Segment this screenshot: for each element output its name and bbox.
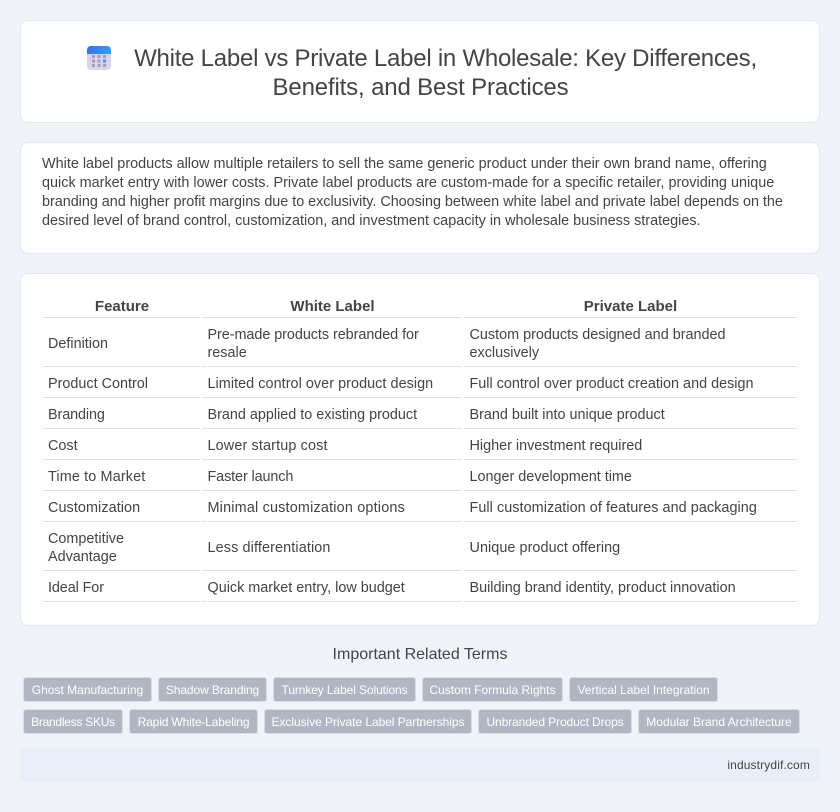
table rows: Unique product offering (470, 540, 620, 556)
table header (95, 298, 677, 315)
table rows: Limited control over product design (208, 376, 433, 392)
table rows: Faster launch (208, 469, 293, 485)
table rows: Less differentiation (208, 540, 331, 556)
footer source text: industrydif.com (727, 758, 810, 772)
footer (20, 748, 820, 782)
table rows: Brand applied to existing product (208, 407, 417, 423)
table rows: exclusively (470, 345, 539, 361)
intro text: White label products allow multiple retailers to sell the same generic product under their own brand name, offering (42, 156, 767, 172)
table rows: Full control over product creation and design (470, 376, 753, 392)
related terms tags: Rapid White-Labeling (138, 715, 249, 729)
table rows (43, 317, 797, 602)
title: White Label vs Private Label in Wholesale: Key Differences, (134, 45, 757, 72)
related terms tags: Brandless SKUs (31, 715, 115, 729)
table rows: Time to Market (48, 469, 145, 485)
table rows: Competitive (48, 531, 124, 547)
table rows: Ideal For (48, 580, 104, 596)
related terms tags: Modular Brand Architecture (646, 715, 792, 729)
related terms tags: Custom Formula Rights (429, 683, 556, 697)
table rows: Brand built into unique product (470, 407, 665, 423)
intro text: branding and higher profit margins due to exclusivity. Choosing between white label and private label depends on the (42, 194, 783, 210)
table rows: Custom products designed and branded (470, 327, 726, 343)
table rows: Higher investment required (470, 438, 642, 454)
table rows: resale (208, 345, 247, 361)
table rows: Quick market entry, low budget (208, 580, 405, 596)
table rows: Building brand identity, product innovation (470, 580, 736, 596)
panel: comparison table (20, 273, 820, 626)
related terms tags: Unbranded Product Drops (486, 715, 624, 729)
title (134, 45, 757, 101)
table rows: Branding (48, 407, 105, 423)
icon: calendar (87, 46, 111, 70)
header card (20, 20, 820, 123)
table rows: Full customization of features and packaging (470, 500, 757, 516)
related terms tags: Ghost Manufacturing (32, 683, 143, 697)
table rows: Lower startup cost (208, 438, 328, 454)
table rows: Pre-made products rebranded for (208, 327, 419, 343)
table rows: Definition (48, 336, 108, 352)
table header: White Label (290, 298, 375, 315)
table rows: Cost (48, 438, 78, 454)
related terms tags: Vertical Label Integration (577, 683, 710, 697)
table rows: Longer development time (470, 469, 632, 485)
table header: Feature (95, 298, 149, 315)
title: Benefits, and Best Practices (273, 74, 568, 101)
table header: Private Label (584, 298, 677, 315)
table rows: Product Control (48, 376, 148, 392)
related terms tags: Exclusive Private Label Partnerships (272, 715, 464, 729)
panel: intro (20, 142, 820, 254)
related terms heading: Important Related Terms (333, 646, 507, 663)
related terms tags: Turnkey Label Solutions (282, 683, 408, 697)
intro text: desired level of brand control, customization, and investment capacity in wholesale business strategies. (42, 213, 701, 229)
table rows: Minimal customization options (208, 500, 405, 516)
intro text: quick market entry with lower costs. Private label products are custom-made for a specific retailer, providing unique (42, 175, 774, 191)
related terms tags: Shadow Branding (166, 683, 259, 697)
intro text (42, 156, 783, 229)
table rows: Customization (48, 500, 140, 516)
table rows: Advantage (48, 549, 117, 565)
related terms tags (23, 677, 800, 734)
